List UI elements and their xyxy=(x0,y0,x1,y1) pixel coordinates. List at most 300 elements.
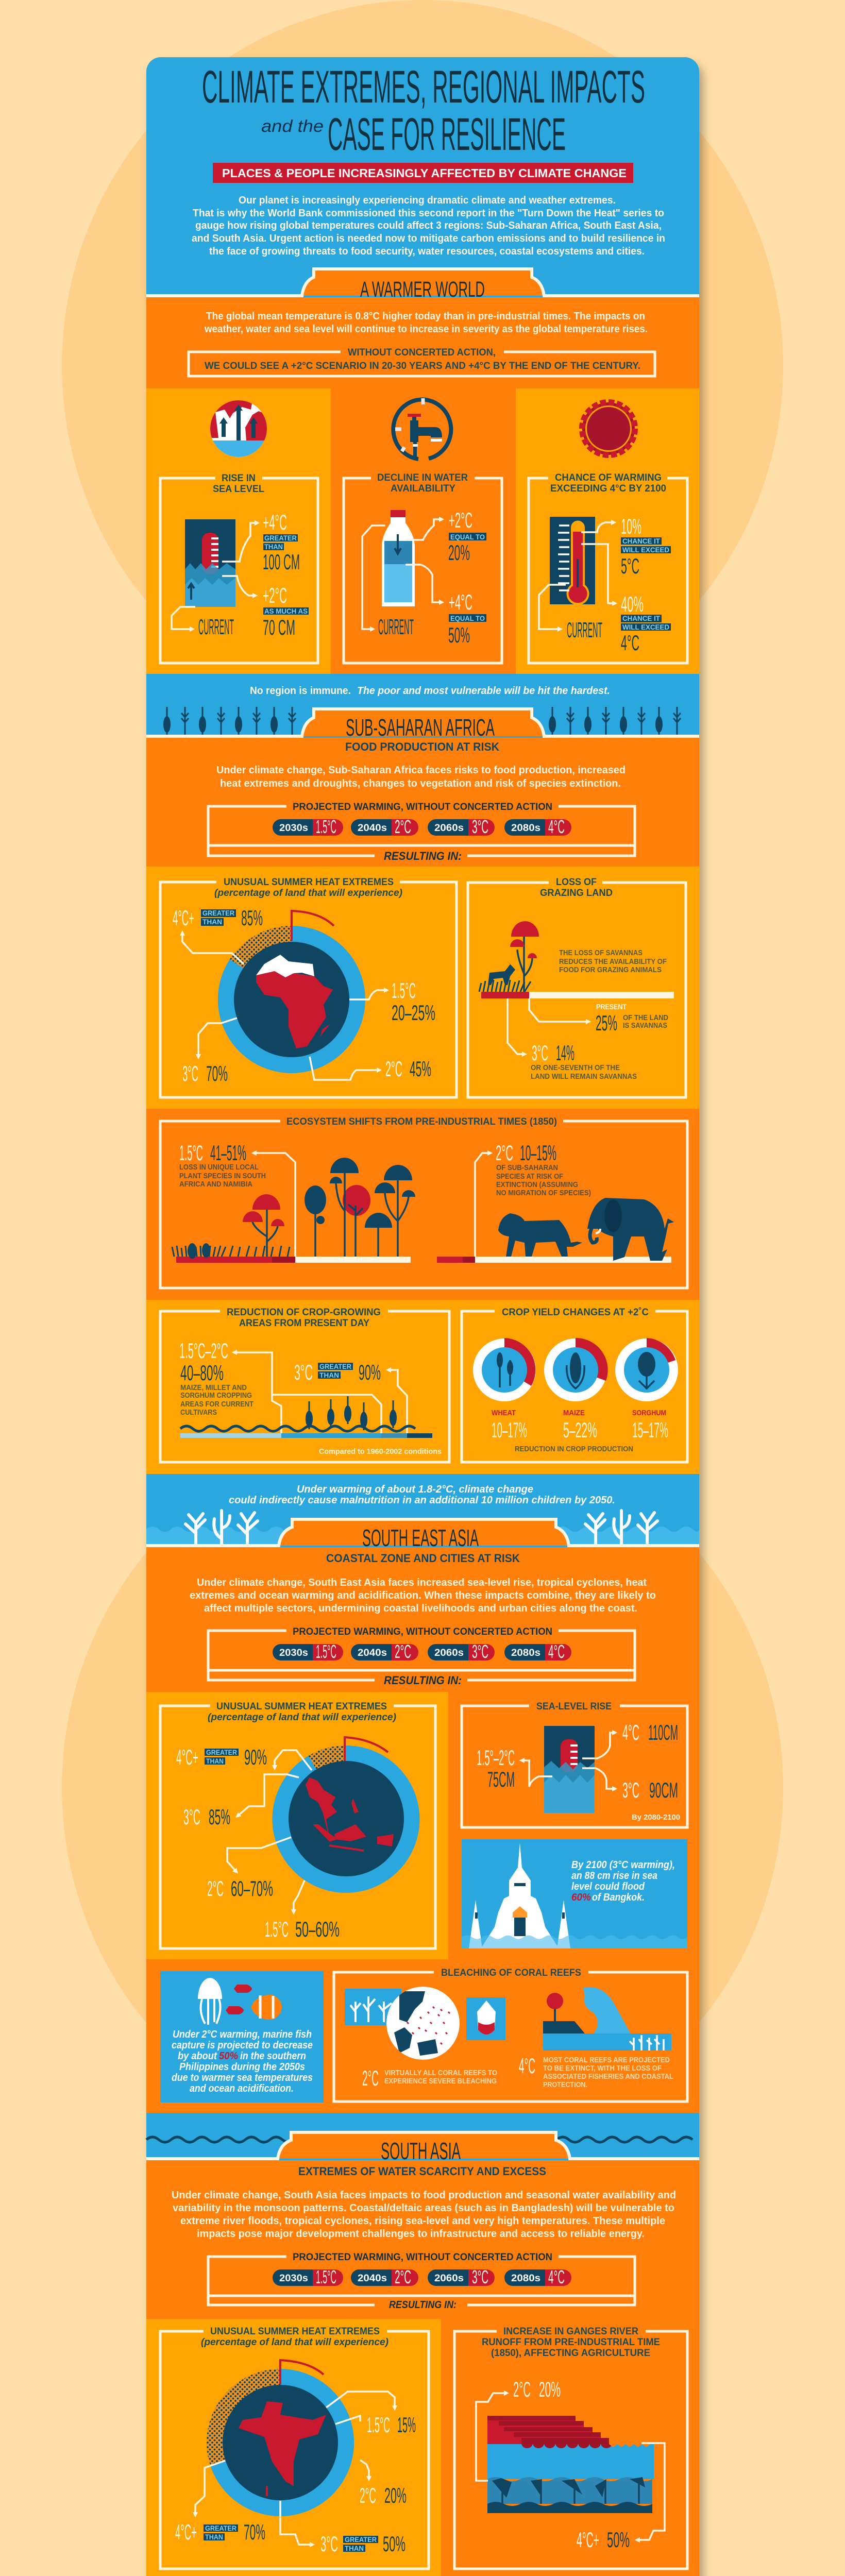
title: and the xyxy=(261,116,324,135)
connectors xyxy=(227,1750,312,1911)
chart: sorghum donut xyxy=(615,1338,678,1401)
text: of Bangkok. xyxy=(592,1892,645,1903)
box and heading: DECLINE IN WATER xyxy=(377,472,468,483)
values xyxy=(176,1745,340,1941)
heading: SEA-LEVEL RISE xyxy=(536,1701,612,1712)
box and heading: SEA LEVEL xyxy=(213,484,264,495)
values: +2°C xyxy=(449,508,472,532)
pill: 2080s: 2080s xyxy=(511,2273,540,2284)
stat: 1.5-2 degrees: 1.5°C–2°C xyxy=(179,1338,228,1363)
values: 4°C+ xyxy=(176,1745,198,1769)
values: 10–17% xyxy=(492,1418,527,1442)
values: MAIZE xyxy=(563,1409,585,1417)
values: IS SAVANNAS xyxy=(623,1021,667,1030)
values: 2°C xyxy=(385,1057,402,1081)
pill: 2040s: 2040s xyxy=(358,2273,387,2284)
section: a warmer world xyxy=(146,269,699,388)
callout: no region is immune xyxy=(250,685,610,697)
values: 85% xyxy=(241,906,263,930)
values: THAN xyxy=(264,543,283,551)
values: 2°C xyxy=(207,1876,224,1901)
values: GREATER xyxy=(264,534,297,542)
subheading: EXTREMES OF WATER SCARCITY AND EXCESS xyxy=(298,2165,546,2178)
heading xyxy=(540,877,613,899)
values: 1.5°–2°C xyxy=(477,1745,515,1770)
values: 70% xyxy=(206,1061,228,1086)
species extinction stat: 2°C xyxy=(496,1141,513,1165)
chart: radial donut with india map xyxy=(207,2360,354,2516)
heading: (1850), AFFECTING AGRICULTURE xyxy=(491,2348,650,2359)
values xyxy=(492,1409,668,1453)
panel: bleaching of coral reefs xyxy=(334,1968,687,2102)
panel: bangkok flood xyxy=(462,1839,687,1948)
heading xyxy=(482,2326,660,2359)
callout: WE COULD SEE A +2°C SCENARIO IN 20-30 YEARS AND +4°C BY THE END OF THE CENTURY. xyxy=(205,361,640,371)
pill: 2080s xyxy=(504,1641,571,1662)
values xyxy=(477,1720,680,1822)
values: WHEAT xyxy=(492,1409,516,1417)
values: 3°C xyxy=(320,2532,338,2556)
icon: savanna with antelope xyxy=(479,921,674,998)
box and heading: CHANCE OF WARMING xyxy=(555,472,662,483)
intro text: weather, water and sea level will continue to increase in severity as the global temperature rises. xyxy=(204,324,648,335)
panel: reduction of crop growing areas xyxy=(160,1307,449,1462)
heading: ECOSYSTEM SHIFTS FROM PRE-INDUSTRIAL TIMES (1850) xyxy=(286,1116,557,1127)
heading: SOUTH EAST ASIA xyxy=(362,1524,479,1551)
values: +2°C xyxy=(263,583,287,607)
values: 1.5°C xyxy=(392,978,416,1003)
values: GREATER xyxy=(205,2524,236,2532)
intro text: variability in the monsoon patterns. Coastal/deltaic areas (such as in Bangladesh) will be vulnerable to xyxy=(173,2202,674,2214)
text: due to warmer sea temperatures xyxy=(172,2072,313,2083)
header xyxy=(192,61,665,257)
values: SORGHUM xyxy=(632,1409,666,1417)
values: GREATER xyxy=(202,909,234,917)
values: PRESENT xyxy=(596,1003,627,1011)
species extinction stat: OF SUB-SAHARAN xyxy=(496,1163,558,1172)
box and heading xyxy=(529,472,687,663)
callout xyxy=(189,347,655,376)
pill: 2060s: 3°C xyxy=(472,1641,488,1662)
values: +4°C xyxy=(263,510,287,534)
values xyxy=(198,510,309,639)
pill: 2030s xyxy=(273,1641,343,1662)
resulting in: RESULTING IN: xyxy=(384,1674,462,1687)
stat: 1.5-2 degrees xyxy=(179,1338,254,1417)
callout: malnutrition: Under warming of about 1.8-2°C, climate change xyxy=(297,1484,533,1495)
pill: 2030s: 1.5°C xyxy=(316,1641,336,1662)
values xyxy=(378,508,486,647)
values: 10% xyxy=(621,514,641,538)
box and heading: EXCEEDING 4°C BY 2100 xyxy=(550,483,666,494)
intro text xyxy=(204,311,648,335)
tree: red acacia xyxy=(243,1194,284,1257)
values: 100 CM xyxy=(263,550,300,574)
connectors xyxy=(539,522,614,629)
amber band: africa results xyxy=(146,867,699,1109)
pill: 2030s: 2030s xyxy=(279,823,308,834)
text: an 88 cm rise in sea xyxy=(571,1870,657,1882)
values: AS MUCH AS xyxy=(264,607,308,615)
subtitle banner: PLACES & PEOPLE INCREASINGLY AFFECTED BY CLIMATE CHANGE xyxy=(222,166,627,180)
panel: sea-level rise xyxy=(462,1701,687,1827)
values: 14% xyxy=(556,1041,574,1065)
heading: (percentage of land that will experience) xyxy=(208,1712,396,1723)
values: 3°C xyxy=(183,1805,200,1829)
values: 3°C xyxy=(182,1061,198,1086)
stat: 3 degrees xyxy=(294,1360,381,1384)
text: 4 degrees: PROTECTION. xyxy=(543,2080,587,2089)
heading: SUB-SAHARAN AFRICA xyxy=(346,714,495,741)
values: 60–70% xyxy=(231,1876,273,1901)
plant species loss stat: PLANT SPECIES IN SOUTH xyxy=(179,1172,266,1180)
text: 2 degrees: 2°C xyxy=(362,2066,379,2090)
text: by about xyxy=(178,2050,217,2062)
heading: UNUSUAL SUMMER HEAT EXTREMES xyxy=(224,877,394,888)
section tab xyxy=(146,1519,699,1546)
icon: coral right xyxy=(585,1511,657,1545)
values: 4°C+ xyxy=(173,906,194,930)
plant species loss stat xyxy=(179,1141,295,1257)
stat: 3 degrees: 90% xyxy=(359,1360,381,1384)
section: south asia xyxy=(146,2132,699,2319)
values: CHANCE IT xyxy=(622,537,660,545)
panel: ganges runoff xyxy=(454,2326,687,2569)
section tab xyxy=(146,2132,699,2159)
box and heading: RISE IN xyxy=(222,473,256,484)
illustration: wave at 4 degrees xyxy=(543,1987,671,2050)
values: CURRENT xyxy=(198,615,234,639)
panel: rise in sea level xyxy=(146,388,331,674)
heading: A WARMER WORLD xyxy=(360,277,485,302)
values: 25% xyxy=(596,1011,617,1035)
values xyxy=(531,1003,668,1081)
pill: 2030s: 2030s xyxy=(279,1648,308,1658)
section: south east asia xyxy=(146,1511,699,1692)
plant species loss stat: LOSS IN UNIQUE LOCAL xyxy=(179,1163,259,1172)
intro text: gauge how rising global temperatures could affect 3 regions: Sub-Saharan Africa, South East Asia, xyxy=(195,220,662,231)
note: Compared to 1960-2002 conditions xyxy=(319,1447,442,1456)
text: in the southern xyxy=(240,2050,306,2062)
resulting in: RESULTING IN: xyxy=(384,850,462,862)
connectors xyxy=(508,998,588,1054)
text: Philippines during the 2050s xyxy=(179,2061,305,2073)
ground bar xyxy=(437,1257,671,1263)
values: OF THE LAND xyxy=(623,1013,668,1022)
heading: CROP YIELD CHANGES AT +2˚C xyxy=(502,1307,649,1318)
values: 5–22% xyxy=(563,1418,597,1442)
values: 50% xyxy=(607,2528,630,2552)
intro text: Under climate change, South East Asia faces increased sea-level rise, tropical cyclones, heat xyxy=(197,1577,647,1588)
icon: lion xyxy=(498,1213,582,1257)
resulting in: RESULTING IN: xyxy=(389,2299,457,2311)
values: 70% xyxy=(244,2520,265,2544)
callout: malnutrition: could indirectly cause malnutrition in an additional 10 million children by 2050. xyxy=(229,1495,615,1506)
stat: 1.5-2 degrees: MAIZE, MILLET AND xyxy=(180,1383,247,1392)
panel: sea-level rise: 110CM xyxy=(648,1720,678,1744)
stat: 3 degrees: 3°C xyxy=(294,1360,313,1384)
values: 50% xyxy=(383,2532,405,2556)
pill: 2040s: 2°C xyxy=(395,1641,411,1662)
values: THAN xyxy=(206,1757,224,1765)
icon: elephant xyxy=(587,1198,674,1261)
heading: SOUTH ASIA xyxy=(381,2138,461,2164)
values: 4°C xyxy=(621,631,639,655)
callout: no region is immune: No region is immune. xyxy=(250,685,351,697)
text: 2 degrees: VIRTUALLY ALL CORAL REEFS TO xyxy=(384,2069,497,2077)
values: 50–60% xyxy=(295,1917,340,1941)
pill: 2040s: 2°C xyxy=(395,2266,411,2287)
text: 50% xyxy=(219,2050,238,2062)
pill: 2080s: 2080s xyxy=(511,823,540,834)
heading xyxy=(214,877,402,899)
intro text: Under climate change, South Asia faces impacts to food production and seasonal water availability and xyxy=(172,2190,676,2201)
amber band: crops xyxy=(146,1300,699,1474)
values: 85% xyxy=(209,1805,230,1829)
text: 4 degrees: ASSOCIATED FISHERIES AND COASTAL xyxy=(543,2072,673,2081)
icon: flooded globe xyxy=(210,400,267,457)
panel: decline in water availability xyxy=(331,388,516,674)
species extinction stat: SPECIES AT RISK OF xyxy=(496,1172,563,1181)
icon: temple xyxy=(462,1843,687,1948)
projected warming timeline: PROJECTED WARMING, WITHOUT CONCERTED ACTION xyxy=(293,802,552,812)
values xyxy=(175,2413,416,2556)
subheading: FOOD PRODUCTION AT RISK xyxy=(345,740,499,753)
intro text: extremes and ocean warming and acidification. When these impacts combine, they are likely to xyxy=(190,1590,656,1601)
panel: africa summer heat extremes xyxy=(160,877,457,1097)
heading: REDUCTION OF CROP-GROWING xyxy=(227,1307,381,1318)
text: savanna loss: THE LOSS OF SAVANNAS xyxy=(559,948,643,957)
chart: gauge xyxy=(544,1726,595,1813)
callout: malnutrition xyxy=(229,1484,615,1506)
text: 60% xyxy=(571,1892,591,1903)
pill: 2080s xyxy=(504,2266,571,2287)
pill: 2030s: 2030s xyxy=(279,2273,308,2284)
icon: tap xyxy=(393,398,451,459)
values: 20% xyxy=(384,2483,407,2507)
heading xyxy=(227,1307,381,1329)
pill: 2080s: 4°C xyxy=(548,1641,565,1662)
pill: 2040s xyxy=(351,1641,418,1662)
plant species loss stat: 41–51% xyxy=(210,1141,246,1165)
values: LAND WILL REMAIN SAVANNAS xyxy=(531,1072,637,1081)
heading: INCREASE IN GANGES RIVER xyxy=(503,2326,638,2337)
text: 4 degrees: MOST CORAL REEFS ARE PROJECTED xyxy=(543,2056,670,2064)
values: THAN xyxy=(345,2544,364,2552)
icon: sun xyxy=(582,402,635,455)
pill: 2030s: 1.5°C xyxy=(316,2266,336,2287)
values: 45% xyxy=(410,1057,431,1081)
intro text: heat extremes and droughts, changes to vegetation and risk of species extinction. xyxy=(220,778,621,789)
connectors xyxy=(195,2392,395,2545)
pill: 2060s: 3°C xyxy=(472,816,488,837)
values: 90% xyxy=(244,1745,267,1769)
callout: no region is immune: The poor and most vulnerable will be hit the hardest. xyxy=(357,685,610,697)
species extinction stat: EXTINCTION (ASSUMING xyxy=(496,1180,578,1189)
projected warming timeline xyxy=(208,1626,635,1687)
species extinction stat xyxy=(475,1141,591,1258)
projected warming timeline xyxy=(208,802,635,862)
section: sub-saharan africa xyxy=(146,707,699,867)
title: CASE FOR RESILIENCE xyxy=(328,108,566,160)
heading: RUNOFF FROM PRE-INDUSTRIAL TIME xyxy=(482,2337,660,2348)
values: 2°C xyxy=(513,2377,531,2401)
box and heading: AVAILABILITY xyxy=(391,483,455,494)
values: 1.5°C xyxy=(367,2413,390,2437)
values: WILL EXCEED xyxy=(622,623,669,631)
species extinction stat: NO MIGRATION OF SPECIES) xyxy=(496,1189,591,1197)
intro text xyxy=(190,1577,656,1614)
callout: WITHOUT CONCERTED ACTION, xyxy=(348,347,496,358)
values: 70 CM xyxy=(263,615,295,639)
stat: 1.5-2 degrees: 40–80% xyxy=(180,1361,224,1385)
icon: coral left xyxy=(185,1511,258,1545)
icon: wheat rows xyxy=(163,707,681,735)
pill: 2030s: 1.5°C xyxy=(316,816,336,837)
projected warming timeline xyxy=(208,2252,635,2311)
pill: 2080s: 2080s xyxy=(511,1648,540,1658)
panel: south asia heat extremes: 15% xyxy=(397,2413,416,2437)
chart: radial donut with asia map xyxy=(272,1737,419,1893)
text: Under 2°C warming, marine fish xyxy=(173,2029,312,2040)
intro text xyxy=(172,2190,676,2240)
connectors xyxy=(172,523,257,629)
values: 20–25% xyxy=(392,1001,435,1025)
values: CURRENT xyxy=(567,618,602,642)
text: capture is projected to decrease xyxy=(172,2040,313,2051)
heading: AREAS FROM PRESENT DAY xyxy=(239,1318,369,1329)
text: 4 degrees xyxy=(519,2054,673,2089)
pill: 2040s: 2°C xyxy=(395,816,411,837)
values: 3°C xyxy=(532,1041,548,1065)
decoration: wave lines xyxy=(146,2137,692,2142)
connectors xyxy=(362,519,441,629)
chart: maize donut xyxy=(544,1338,608,1401)
subheading: COASTAL ZONE AND CITIES AT RISK xyxy=(326,1552,520,1565)
chart: sea level gauge xyxy=(185,519,235,607)
panel: loss of grazing land xyxy=(468,877,686,1097)
section tab xyxy=(146,709,699,736)
intro text: impacts pose major development challenges to infrastructure and access to reliable energy. xyxy=(197,2228,645,2240)
pill: 2040s xyxy=(351,816,418,837)
intro text xyxy=(216,765,626,789)
panel: ecosystem shifts xyxy=(146,1109,699,1300)
chart: radial donut with africa map xyxy=(218,911,365,1073)
intro text: extreme river floods, tropical cyclones, rising sea-level and very high temperatures. These multiple xyxy=(180,2215,665,2227)
values: THAN xyxy=(205,2533,223,2541)
intro text: the face of growing threats to food security, water resources, coastal ecosystems and cities. xyxy=(209,246,645,257)
pill: 2060s: 2060s xyxy=(434,2273,464,2284)
chart: wheat donut xyxy=(473,1338,536,1401)
pill: 2080s xyxy=(504,816,571,837)
pill: 2060s xyxy=(428,2266,495,2287)
intro text: affect multiple sectors, undermining coastal livelihoods and urban cities along the coast. xyxy=(204,1603,637,1614)
chart: water bottle xyxy=(382,510,415,606)
values xyxy=(513,2377,630,2552)
values: REDUCTION IN CROP PRODUCTION xyxy=(515,1445,633,1453)
values: 20% xyxy=(539,2377,561,2401)
panel: marine fish xyxy=(160,1971,324,2103)
values: EQUAL TO xyxy=(450,533,485,541)
heading xyxy=(201,2326,388,2348)
values: THAN xyxy=(202,918,222,926)
poster card xyxy=(146,57,699,2576)
values: 75CM xyxy=(487,1767,515,1791)
values: 5°C xyxy=(621,554,639,578)
heading: BLEACHING OF CORAL REEFS xyxy=(441,1968,581,1978)
heading: LOSS OF xyxy=(556,877,597,888)
panel: chance of warming xyxy=(516,388,699,674)
pill: 2060s xyxy=(428,1641,495,1662)
text: savanna loss: FOOD FOR GRAZING ANIMALS xyxy=(559,965,662,974)
values: 3°C xyxy=(622,1778,639,1802)
pill: 2060s xyxy=(428,816,495,837)
text: 4 degrees: TO BE EXTINCT, WITH THE LOSS OF xyxy=(543,2064,662,2073)
pill: 2060s: 3°C xyxy=(472,2266,488,2287)
pill: 2060s: 2060s xyxy=(434,1648,464,1658)
plant species loss stat: 1.5°C xyxy=(179,1141,203,1165)
values: OR ONE-SEVENTH OF THE xyxy=(531,1063,620,1072)
subtitle banner xyxy=(213,163,633,183)
values: 40% xyxy=(621,592,644,616)
heading: UNUSUAL SUMMER HEAT EXTREMES xyxy=(210,2326,380,2337)
values: 4°C+ xyxy=(577,2528,599,2552)
orange body: south east asia results xyxy=(146,1692,699,2113)
species extinction stat: 10–15% xyxy=(520,1141,556,1165)
illustration: globe and reefs at 2 degrees xyxy=(345,1987,505,2060)
text xyxy=(172,2029,313,2094)
text: and ocean acidification. xyxy=(190,2083,294,2094)
intro text xyxy=(192,195,665,257)
intro text: Our planet is increasingly experiencing dramatic climate and weather extremes. xyxy=(239,195,616,206)
pill: 2040s: 2040s xyxy=(358,1648,387,1658)
text: level could flood xyxy=(571,1881,645,1892)
intro text: Under climate change, Sub-Saharan Africa faces risks to food production, increased xyxy=(216,765,626,776)
values: CURRENT xyxy=(378,615,414,639)
connectors xyxy=(182,934,386,1080)
pill: 2030s xyxy=(273,816,343,837)
values: 50% xyxy=(448,623,470,647)
intro text: and South Asia. Urgent action is needed now to mitigate carbon emissions and to build resilience in xyxy=(192,233,665,244)
values: WILL EXCEED xyxy=(622,546,669,554)
illustration: forest and grassland xyxy=(172,1158,415,1263)
values xyxy=(173,906,435,1086)
orange body: south asia results xyxy=(146,2319,699,2576)
pill: 2080s: 4°C xyxy=(548,2266,565,2287)
text: 2 degrees: EXPERIENCE SEVERE BLEACHING xyxy=(384,2077,497,2086)
heading: UNUSUAL SUMMER HEAT EXTREMES xyxy=(216,1701,387,1712)
stat: 3 degrees: GREATER xyxy=(319,1362,351,1370)
plant species loss stat: AFRICA AND NAMIBIA xyxy=(179,1180,252,1189)
values xyxy=(567,514,671,655)
connectors xyxy=(522,1733,614,1789)
values: 20% xyxy=(448,540,470,565)
text: 2 degrees xyxy=(362,2066,497,2090)
stat: 1.5-2 degrees: AREAS FOR CURRENT xyxy=(180,1400,254,1409)
connectors xyxy=(235,1352,407,1438)
text: savanna loss: REDUCES THE AVAILABILITY OF xyxy=(559,957,667,966)
projected warming timeline: PROJECTED WARMING, WITHOUT CONCERTED ACTION xyxy=(293,2252,552,2263)
title xyxy=(202,61,645,160)
box and heading xyxy=(160,473,318,663)
pill: 2060s: 2060s xyxy=(434,823,464,834)
heading xyxy=(208,1701,396,1723)
heading: (percentage of land that will experience) xyxy=(201,2337,388,2348)
pill: 2080s: 4°C xyxy=(548,816,565,837)
panel: crop yield changes xyxy=(462,1307,687,1462)
stat: 1.5-2 degrees: SORGHUM CROPPING xyxy=(180,1391,252,1400)
values: GREATER xyxy=(345,2535,377,2544)
